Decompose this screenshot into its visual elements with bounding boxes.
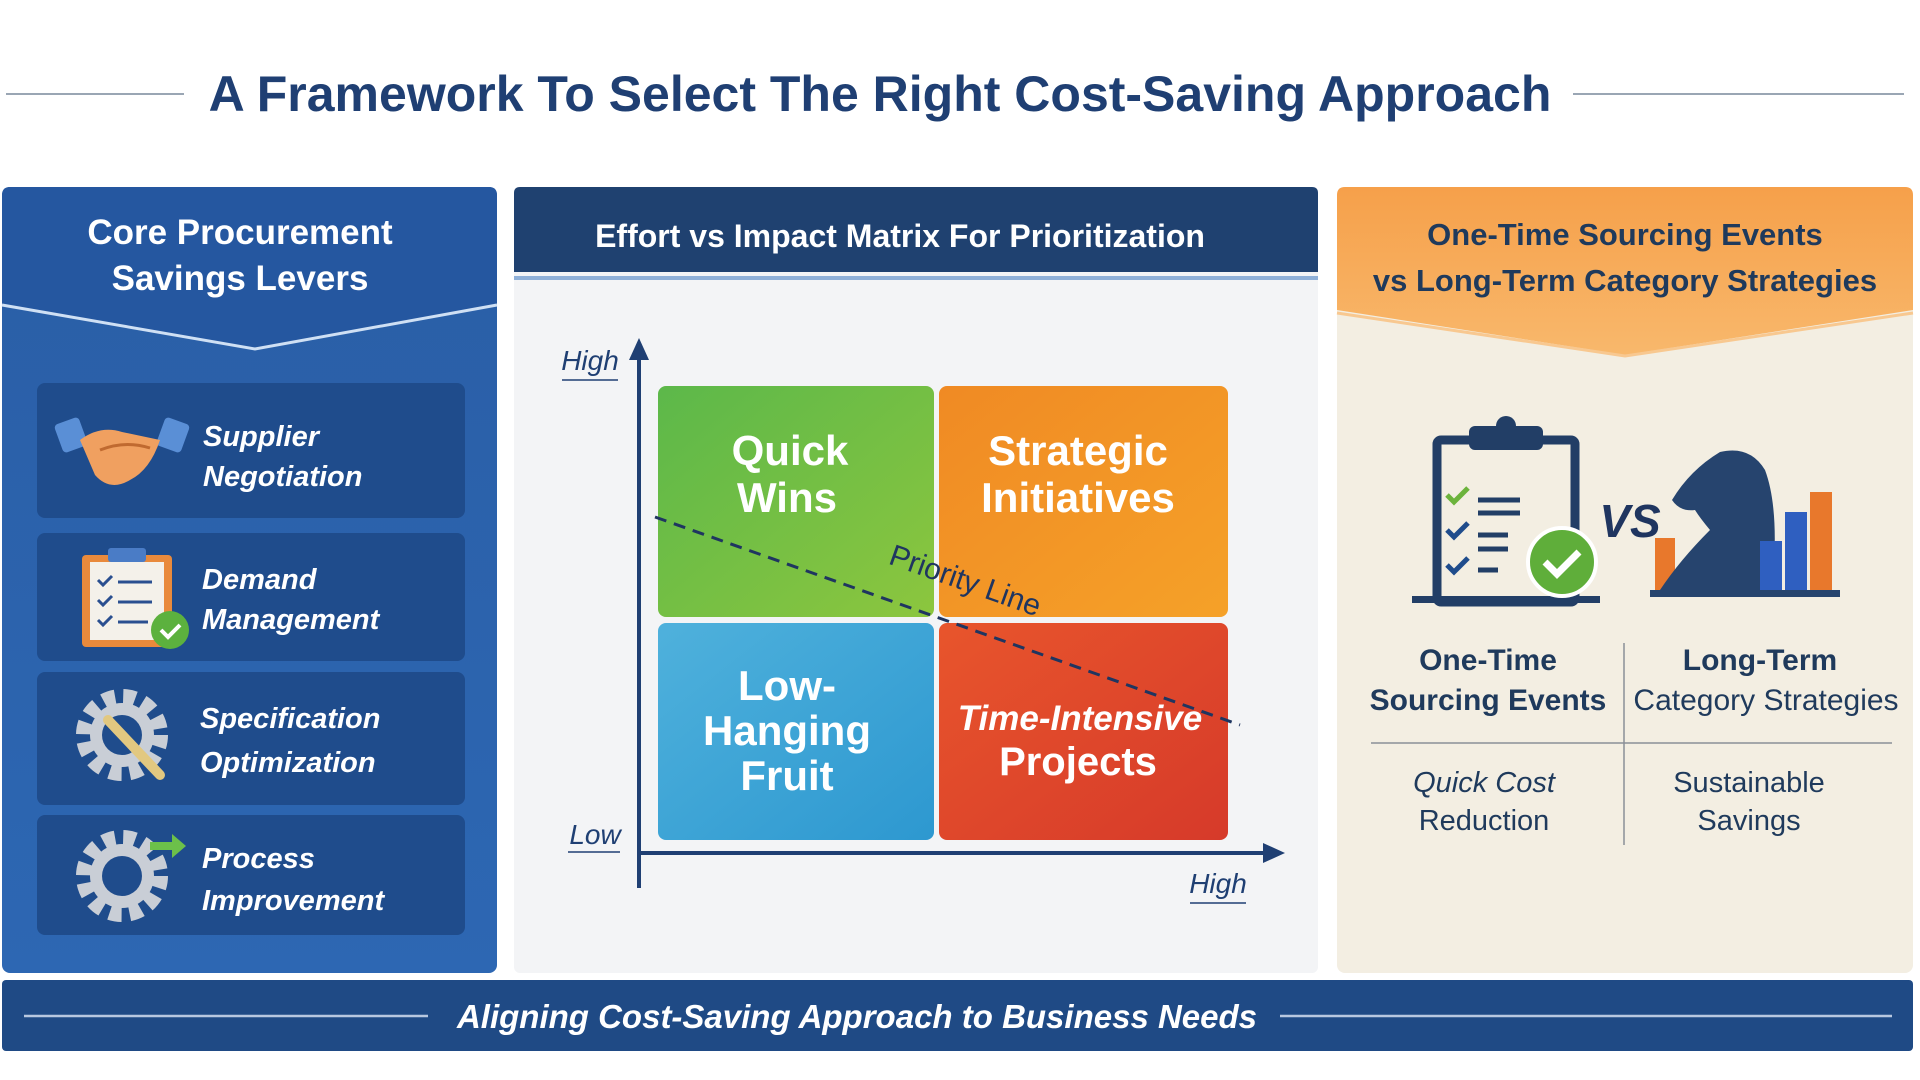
quadrant: time-intensive projects: Projects [999,740,1157,784]
quadrant: quick wins [658,386,934,617]
item: process improvement [37,815,465,935]
icon: chess knight with bar chart [1650,450,1840,597]
quadrant: time-intensive projects [939,623,1228,840]
quadrant: strategic initiatives: Initiatives [981,474,1175,521]
item: supplier negotiation: Negotiation [203,461,362,493]
quadrant: quick wins: Quick [732,427,849,474]
item: demand management: Demand [202,564,318,596]
quadrant: strategic initiatives [939,386,1228,617]
comparison table: Long-Term [1683,644,1837,677]
item: specification optimization [37,672,465,805]
title: A Framework To Select The Right Cost-Saving Approach [209,66,1551,122]
heading: core levers: Core Procurement [87,213,393,252]
quadrant: time-intensive projects: Time-Intensive [958,699,1202,738]
item: supplier negotiation [37,383,465,518]
quadrant: low-hanging fruit: Low- [738,662,836,709]
chart: 2x2 matrix [561,338,1285,903]
quadrant: quick wins: Wins [737,474,837,521]
heading: one-time vs long-term: One-Time Sourcing Events [1427,217,1823,252]
panel: effort vs impact matrix [514,187,1318,973]
bottom banner [2,980,1913,1051]
axes [561,338,1285,903]
item: process improvement: Process [202,843,315,875]
icon: gear with wrench [84,697,160,775]
item: process improvement: Improvement [202,885,385,917]
item: demand management [37,533,465,661]
quadrant: low-hanging fruit: Fruit [740,752,834,799]
priority line [655,517,1240,725]
comparison table: Sustainable [1673,767,1825,799]
quadrant: low-hanging fruit: Hanging [703,707,871,754]
panel: one-time vs long-term [1337,187,1913,973]
heading: one-time vs long-term [1337,187,1913,356]
comparison table: Sourcing Events [1370,684,1606,717]
item: specification optimization: Optimization [200,747,376,779]
heading: matrix: Effort vs Impact Matrix For Prioritization [595,218,1205,254]
axes: High [561,345,619,376]
comparison table: Quick Cost [1413,767,1557,799]
heading: one-time vs long-term: vs Long-Term Category Strategies [1373,263,1877,298]
comparison table: Savings [1697,805,1801,837]
icon: clipboard checklist [1412,416,1600,603]
bottom banner: Aligning Cost-Saving Approach to Business Needs [456,998,1257,1035]
quadrant: low-hanging fruit [658,623,934,840]
heading: matrix [514,187,1318,280]
icon: handshake [54,416,190,485]
icon: clipboard [82,548,189,649]
comparison table: Reduction [1419,805,1549,837]
icon: gear with arrow [84,834,186,914]
axes: High [1189,868,1247,899]
comparison table: Category Strategies [1633,684,1899,717]
item: supplier negotiation: Supplier [203,421,321,453]
text: vs: VS [1599,495,1661,547]
quadrant: strategic initiatives: Strategic [988,427,1168,474]
comparison table: One-Time [1419,644,1557,677]
priority line: Priority Line [885,539,1045,623]
item: specification optimization: Specification [200,703,380,735]
axes: Low [569,819,622,850]
heading: core levers: Savings Levers [112,259,368,298]
panel: core procurement savings levers [2,187,497,973]
comparison table [1370,643,1899,845]
heading: core levers [2,187,497,349]
item: demand management: Management [202,604,381,636]
